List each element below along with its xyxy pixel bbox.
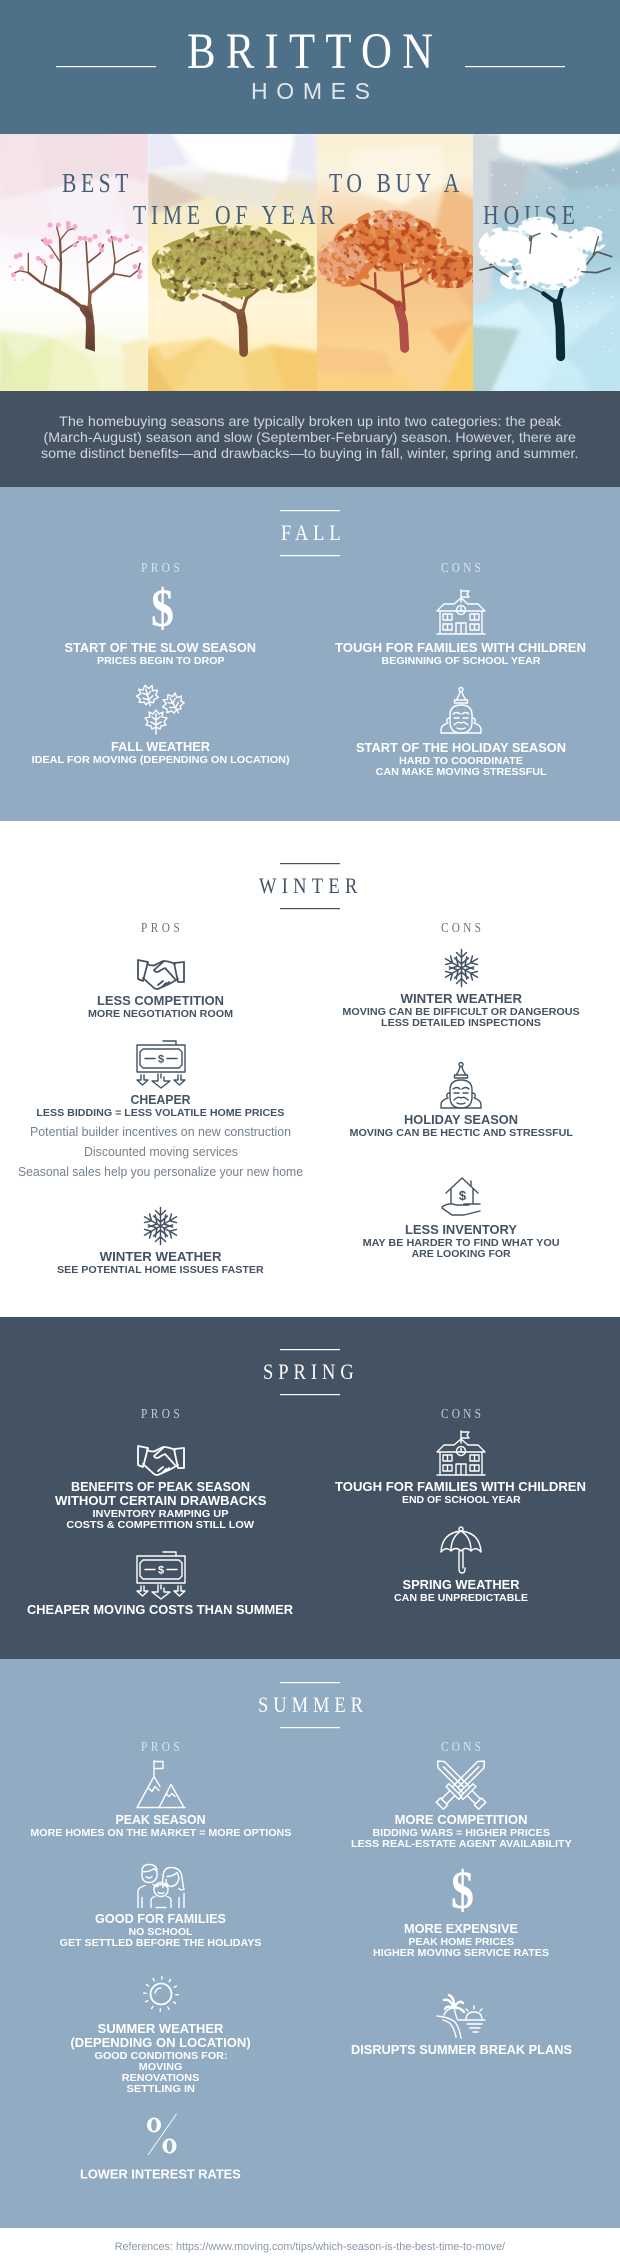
text: disrupts summer: DISRUPTS SUMMER BREAK PLANS (351, 2043, 572, 2057)
text: good for families (60, 1912, 262, 1949)
text: benefits of peak (55, 1480, 266, 1531)
icon: money down: $ (158, 1564, 164, 1576)
text: winter weather con (342, 992, 580, 1029)
text: peak season (30, 1813, 292, 1839)
brand subtitle: HOMES (251, 78, 370, 104)
text: benefits of peak: WITHOUT CERTAIN DRAWBACKS (55, 1494, 266, 1508)
text: more expensive (373, 1922, 549, 1959)
icon: umbrella (441, 1527, 481, 1573)
cons heading: CONS (441, 1739, 481, 1754)
background: autumn panel (314, 134, 476, 395)
text: more competition (351, 1813, 572, 1850)
intro text (41, 413, 578, 461)
brand name: BRITTON (187, 24, 433, 80)
text: winter weather con: LESS DETAILED INSPECTIONS (381, 1018, 541, 1029)
text: good for families: GET SETTLED BEFORE THE HOLIDAYS (60, 1938, 262, 1949)
heading: winter: WINTER (259, 875, 358, 898)
icon: house in hand: $ (459, 1188, 467, 1203)
text: cheaper: Seasonal sales help you personalize your new home (18, 1164, 303, 1179)
text: holiday season: START OF THE HOLIDAY SEASON (356, 741, 566, 755)
background: summer panel (145, 134, 320, 395)
text: cheaper: CHEAPER (130, 1093, 190, 1107)
panel: fall (0, 487, 620, 821)
text: spring weather: CAN BE UNPREDICTABLE (394, 1593, 528, 1604)
text: good for families: GOOD FOR FAMILIES (95, 1912, 226, 1926)
text: less inventory: ARE LOOKING FOR (412, 1249, 511, 1260)
text: summer weather: MOVING (139, 2062, 183, 2073)
text: lower interest rates: LOWER INTEREST RATES (80, 2168, 241, 2182)
text: less competition: MORE NEGOTIATION ROOM (88, 1009, 233, 1020)
text: benefits of peak: INVENTORY RAMPING UP (92, 1509, 229, 1520)
text: summer weather: GOOD CONDITIONS FOR: (94, 2051, 228, 2062)
text: holiday season (356, 741, 566, 778)
text: benefits of peak: BENEFITS OF PEAK SEASON (71, 1480, 250, 1494)
text: families (335, 1480, 586, 1506)
text: less inventory: LESS INVENTORY (405, 1223, 518, 1237)
text: more competition: MORE COMPETITION (395, 1813, 528, 1827)
text: cheaper (18, 1093, 303, 1179)
text: fall weather: FALL WEATHER (111, 740, 210, 754)
intro band (0, 391, 620, 487)
background: winter panel (473, 134, 620, 391)
text: more expensive: PEAK HOME PRICES (408, 1937, 514, 1948)
text: cheaper moving: CHEAPER MOVING COSTS THAN SUMMER (27, 1603, 293, 1617)
text: spring weather: SPRING WEATHER (402, 1578, 520, 1592)
text: cheaper: LESS BIDDING = LESS VOLATILE HOME PRICES (36, 1108, 285, 1119)
panel: summer (0, 1659, 620, 2228)
cons heading: CONS (441, 1406, 481, 1421)
text: peak season: PEAK SEASON (116, 1813, 206, 1827)
text: cheaper: Potential builder incentives on new construction (30, 1124, 291, 1139)
title on banner: HOUSE (483, 201, 575, 231)
text: more expensive: HIGHER MOVING SERVICE RATES (373, 1948, 549, 1959)
text: holiday season: HARD TO COORDINATE (399, 756, 523, 767)
title on banner: TIME OF YEAR (133, 201, 335, 231)
text: summer weather: SETTLING IN (126, 2084, 195, 2095)
heading: fall: FALL (281, 522, 341, 545)
icon: crossed swords (431, 1755, 491, 1812)
icon: house in hand (442, 1178, 480, 1215)
heading: spring: SPRING (263, 1361, 354, 1384)
text: summer weather: (DEPENDING ON LOCATION) (70, 2036, 251, 2050)
text: winter weather pro: WINTER WEATHER (100, 1250, 222, 1264)
intro text: some distinct benefits—and drawbacks—to buying in fall, winter, spring and summer. (41, 445, 578, 461)
text: fall weather (32, 740, 290, 766)
icon: school (437, 590, 485, 634)
tree: summer (152, 225, 317, 353)
intro text: (March-August) season and slow (September-February) season. However, there are (44, 429, 576, 445)
text: holiday season: HOLIDAY SEASON (404, 1113, 518, 1127)
intro text: The homebuying seasons are typically broken up into two categories: the peak (59, 413, 562, 429)
text: winter weather con: MOVING CAN BE DIFFICULT OR DANGEROUS (342, 1007, 580, 1018)
icon: handshake (138, 960, 184, 989)
pros heading: PROS (141, 1739, 180, 1754)
icon: island sunset (437, 1995, 485, 2038)
icon: percent (147, 2114, 176, 2155)
text: families: TOUGH FOR FAMILIES WITH CHILDREN (335, 641, 586, 655)
text: holiday season (350, 1113, 573, 1139)
icon: school (437, 1431, 485, 1475)
title on banner: BEST (62, 169, 128, 199)
icon: sun (145, 1978, 177, 2010)
icon: money down (137, 1552, 185, 1599)
text: winter weather pro: SEE POTENTIAL HOME ISSUES FASTER (57, 1265, 265, 1276)
icon: dollar: $ (451, 1860, 474, 1920)
references footer (0, 2228, 620, 2266)
text: less inventory: MAY BE HARDER TO FIND WHAT YOU (363, 1238, 560, 1249)
title on banner (62, 169, 575, 231)
text: cheaper: Discounted moving services (84, 1144, 238, 1159)
cons heading: CONS (441, 920, 481, 935)
text: good for families: NO SCHOOL (128, 1927, 192, 1938)
text: summer weather: RENOVATIONS (122, 2073, 200, 2084)
icon: santa (441, 1062, 481, 1108)
text: families: END OF SCHOOL YEAR (402, 1495, 522, 1506)
panel: winter (0, 821, 620, 1317)
text: less inventory (363, 1223, 560, 1260)
icon: snowflake (442, 950, 481, 986)
text: winter weather con: WINTER WEATHER (400, 992, 522, 1006)
seasons banner image (0, 134, 620, 391)
text: less competition (88, 994, 233, 1020)
text: more expensive: MORE EXPENSIVE (404, 1922, 518, 1936)
text: slow season: START OF THE SLOW SEASON (64, 641, 256, 655)
icon: handshake (138, 1446, 184, 1475)
text: holiday season: CAN MAKE MOVING STRESSFUL (376, 767, 547, 778)
icon: santa (441, 688, 481, 733)
icon: snowflake (141, 1208, 180, 1244)
pros heading: PROS (141, 1406, 180, 1421)
tree: autumn (315, 210, 478, 348)
text: benefits of peak: COSTS & COMPETITION STILL LOW (66, 1520, 255, 1531)
cons heading: CONS (441, 560, 481, 575)
icon: dollar: $ (151, 578, 174, 638)
text: winter weather pro (57, 1250, 265, 1276)
text: families (335, 641, 586, 667)
text: families: TOUGH FOR FAMILIES WITH CHILDREN (335, 1480, 586, 1494)
text: slow season (64, 641, 256, 667)
pros heading: PROS (141, 920, 180, 935)
tree: spring (10, 223, 143, 352)
references footer: References: https://www.moving.com/tips/which-season-is-the-best-time-to-move/ (115, 2241, 506, 2253)
text: families: BEGINNING OF SCHOOL YEAR (382, 656, 541, 667)
title on banner: TO BUY A (329, 169, 460, 199)
icon: family (138, 1864, 184, 1908)
tree: winter (478, 140, 613, 357)
text: peak season: MORE HOMES ON THE MARKET = MORE OPTIONS (30, 1828, 292, 1839)
icon: leaves (134, 683, 188, 734)
text: slow season: PRICES BEGIN TO DROP (97, 656, 225, 667)
pros heading: PROS (141, 560, 180, 575)
header band (0, 0, 620, 134)
text: fall weather: IDEAL FOR MOVING (DEPENDING ON LOCATION) (32, 755, 290, 766)
icon: mountain (137, 1760, 185, 1808)
icon: money down: $ (158, 1054, 164, 1066)
text: more competition: BIDDING WARS = HIGHER PRICES (372, 1828, 550, 1839)
text: more competition: LESS REAL-ESTATE AGENT AVAILABILITY (351, 1839, 572, 1850)
text: holiday season: MOVING CAN BE HECTIC AND STRESSFUL (350, 1128, 573, 1139)
text: less competition: LESS COMPETITION (97, 994, 224, 1008)
text: summer weather (70, 2022, 251, 2095)
panel: spring (0, 1317, 620, 1659)
text: summer weather: SUMMER WEATHER (98, 2022, 223, 2036)
heading: summer: SUMMER (258, 1694, 363, 1717)
background: spring panel (0, 134, 148, 391)
icon: money down (137, 1041, 185, 1088)
text: spring weather (394, 1578, 528, 1604)
